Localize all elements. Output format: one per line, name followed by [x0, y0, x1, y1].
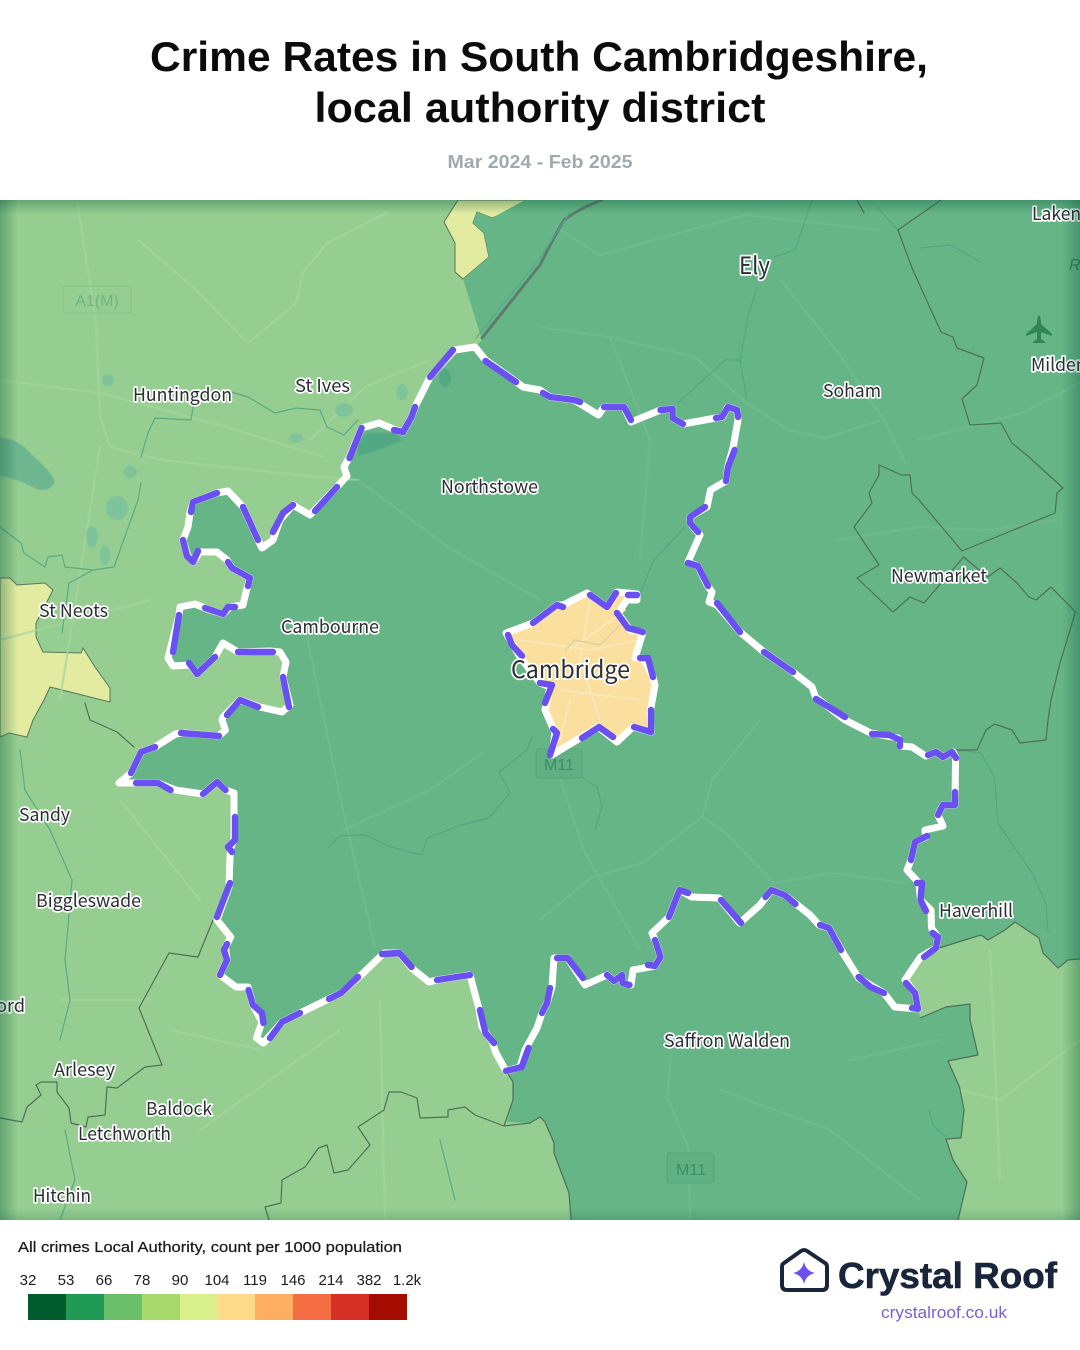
roads on dark green areas: [307, 215, 1080, 1220]
place labels: Northstowe: [441, 473, 538, 499]
legend: [18, 1239, 422, 1320]
lake: west reservoir: [0, 437, 55, 490]
place labels: Letchworth: [78, 1120, 171, 1146]
legend values: 214: [318, 1272, 344, 1289]
place labels: Huntingdon: [133, 381, 232, 407]
road badge: A1(M): A1(M): [75, 293, 119, 310]
region: yellow district north: [444, 200, 525, 279]
legend values: 104: [204, 1272, 230, 1289]
website link: crystalroof.co.uk: [881, 1303, 1008, 1322]
legend values: 1.2k: [393, 1272, 422, 1289]
region: Cambridge fill: [511, 596, 652, 748]
district boundary lines: [0, 200, 1080, 1220]
place labels: Ely: [739, 246, 770, 281]
place labels: Saffron Walden: [664, 1027, 790, 1053]
title: [150, 33, 928, 131]
legend values: 66: [96, 1272, 112, 1289]
legend values: 90: [172, 1272, 188, 1289]
title: Crime Rates in South Cambridgeshire,: [150, 33, 928, 80]
place labels: Soham: [823, 377, 881, 403]
boundary: white line around Cambridge: [506, 592, 655, 755]
boundary: white line around South Cambridgeshire: [119, 347, 956, 1071]
legend values: 119: [243, 1272, 267, 1289]
place labels: Arlesey: [54, 1056, 116, 1082]
legend values: 32: [20, 1272, 36, 1289]
place labels: Hitchin: [33, 1182, 91, 1208]
legend colour scale: [28, 1294, 407, 1320]
boundary: purple dashes: [131, 350, 956, 1071]
gravel pits and water patches: [86, 369, 451, 565]
place labels: St Ives: [295, 372, 350, 398]
rivers: [0, 200, 1048, 1220]
road badge: A1(M): [63, 286, 131, 313]
roads inside Cambridge: [520, 600, 640, 740]
map edge vignette: [0, 200, 1080, 1220]
place labels: St Neots: [39, 597, 108, 623]
wordmark: Crystal Roof: [838, 1255, 1058, 1296]
icon: airport plane: [1026, 315, 1052, 343]
icon: purple star: [793, 1262, 815, 1284]
region: South Cambridgeshire fill: [119, 347, 956, 1071]
place labels: Sandy: [19, 801, 71, 827]
icon: house outline: [782, 1250, 827, 1290]
roads on light green areas: [0, 200, 1080, 1220]
place labels: Newmarket: [891, 562, 987, 588]
region: dark green neighbouring districts east and south: [463, 200, 1080, 1220]
legend title: All crimes Local Authority, count per 1000 population: [18, 1239, 402, 1256]
legend values: 146: [280, 1272, 306, 1289]
road badge: M11 south: [667, 1153, 714, 1183]
place labels: Cambridge: [511, 650, 630, 685]
road badge: M11 north: M11: [544, 757, 574, 774]
legend values: 78: [134, 1272, 150, 1289]
place labels: Cambourne: [281, 613, 379, 639]
map base: light green areas: [0, 200, 1080, 1220]
place labels: Haverhill: [939, 897, 1013, 923]
railway line with parallel river: [476, 200, 602, 338]
place labels: Biggleswade: [36, 887, 141, 913]
region: yellow district west (St Neots): [0, 578, 110, 737]
choropleth map: [0, 200, 1080, 1220]
subtitle: date range: Mar 2024 - Feb 2025: [448, 152, 632, 172]
road badge: M11 south: M11: [676, 1162, 706, 1179]
legend values: 53: [58, 1272, 74, 1289]
road badge: M11 north: [536, 749, 582, 778]
legend values: 382: [356, 1272, 382, 1289]
place labels: Baldock: [146, 1095, 212, 1121]
legend values: [20, 1272, 422, 1289]
title: local authority district: [314, 84, 766, 131]
place labels: [0, 200, 1080, 1208]
logo: Crystal Roof: [782, 1250, 1058, 1322]
